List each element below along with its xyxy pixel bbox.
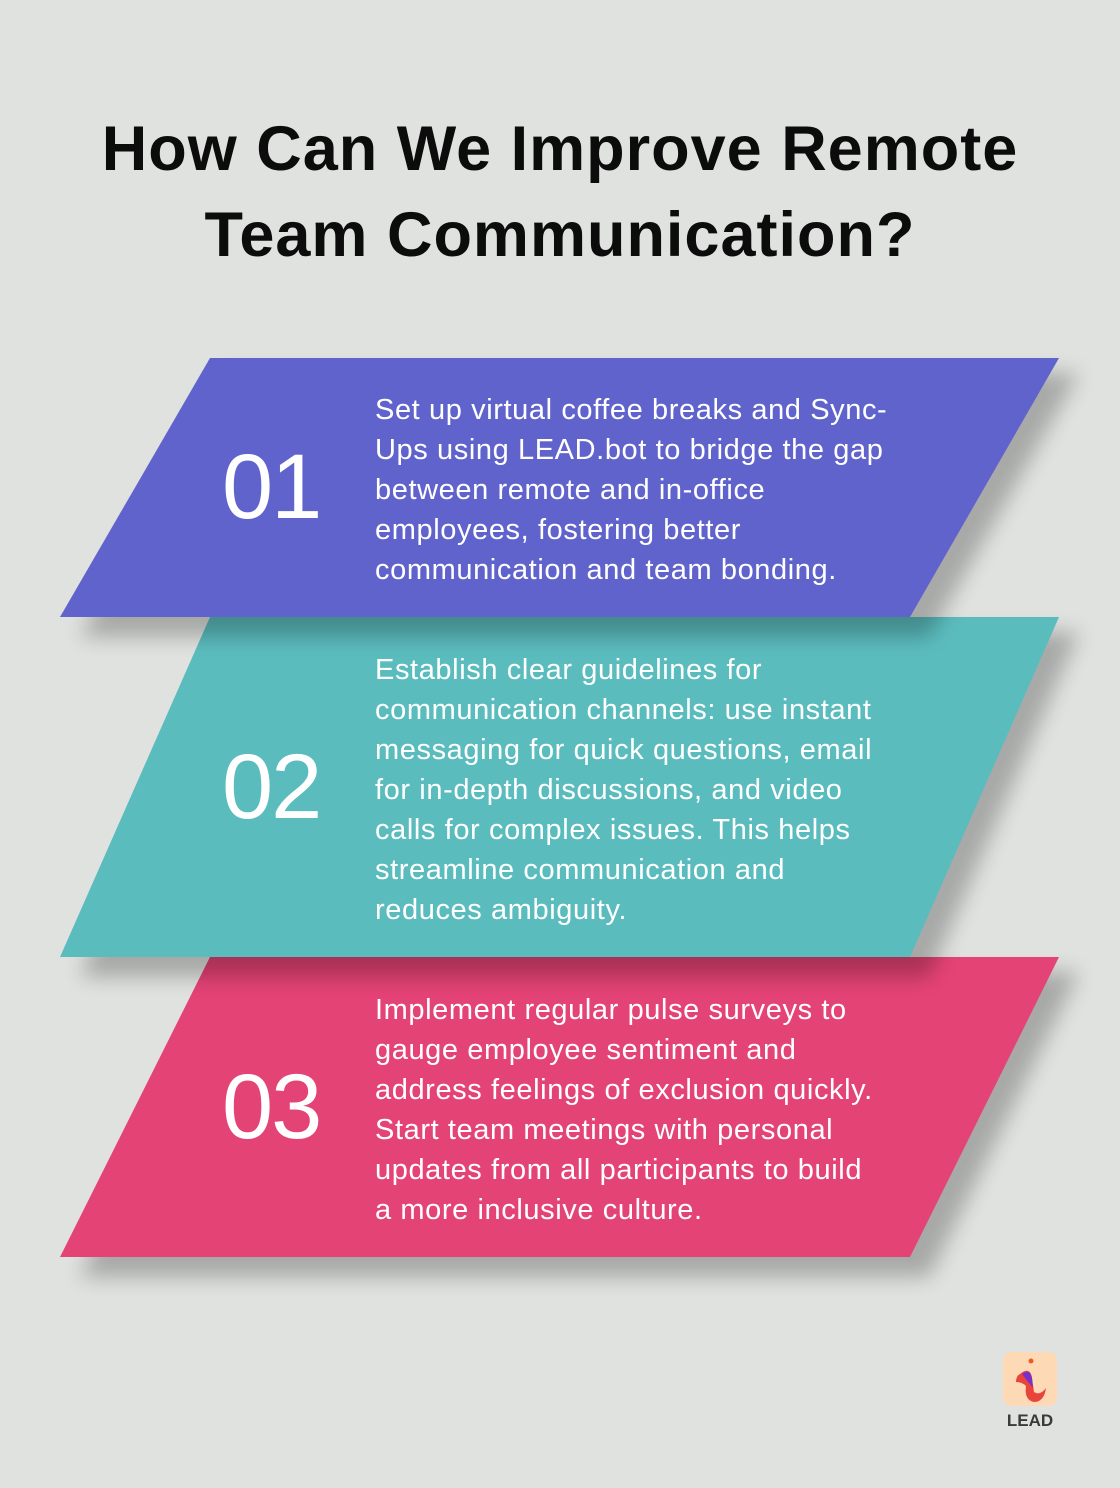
text 01: communication and team bonding. — [375, 554, 837, 586]
text 03: gauge employee sentiment and — [375, 1034, 796, 1066]
title — [102, 114, 1018, 270]
text 02: for in-depth discussions, and video — [375, 774, 843, 806]
text 02: Establish clear guidelines for — [375, 654, 762, 686]
number 02: 02 — [222, 736, 320, 838]
text 01: between remote and in-office — [375, 474, 765, 506]
text 02: communication channels: use instant — [375, 694, 872, 726]
title: Team Communication? — [205, 200, 915, 270]
text 03: Start team meetings with personal — [375, 1114, 833, 1146]
panel 2 shadow and shape — [60, 617, 1079, 977]
number 03: 03 — [222, 1056, 320, 1158]
text 03: a more inclusive culture. — [375, 1194, 703, 1226]
number 01: 01 — [222, 436, 320, 538]
text 02 — [375, 654, 872, 926]
logo — [1003, 1352, 1057, 1430]
panel 1 shadow and shape — [60, 358, 1079, 637]
title: How Can We Improve Remote — [102, 114, 1018, 184]
text 02: messaging for quick questions, email — [375, 734, 872, 766]
text 02: calls for complex issues. This helps — [375, 814, 851, 846]
text 01: Set up virtual coffee breaks and Sync- — [375, 394, 887, 426]
text 03: address feelings of exclusion quickly. — [375, 1074, 873, 1106]
text 01: employees, fostering better — [375, 514, 741, 546]
text 03: updates from all participants to build — [375, 1154, 862, 1186]
icon: logo bird — [1003, 1352, 1057, 1406]
text 01: Ups using LEAD.bot to bridge the gap — [375, 434, 883, 466]
text 02: streamline communication and — [375, 854, 785, 886]
text 02: reduces ambiguity. — [375, 894, 627, 926]
logo text: LEAD — [1007, 1411, 1053, 1430]
text 01 — [375, 394, 887, 586]
text 03: Implement regular pulse surveys to — [375, 994, 847, 1026]
panel 3 shadow and shape — [60, 957, 1079, 1277]
text 03 — [375, 994, 873, 1226]
